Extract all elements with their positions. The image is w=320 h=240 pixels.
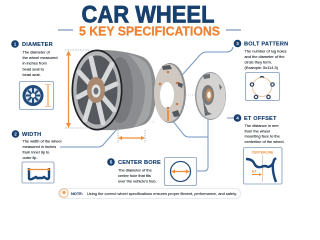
- heading: diameter: DIAMETER: [22, 42, 53, 48]
- badge 4: 4: [236, 116, 239, 121]
- diameter arrow: [65, 50, 90, 128]
- diameter description: bead seat to: [22, 66, 44, 71]
- heading: center bore: CENTER BORE: [118, 160, 161, 166]
- leader lines: [60, 47, 234, 171]
- et offset diagram: [244, 148, 282, 184]
- brake rotor disc: [154, 63, 186, 123]
- title: CAR WHEEL: [82, 2, 214, 28]
- wheel barrel: [100, 50, 156, 130]
- center bore description: over the vehicle's hub.: [118, 178, 157, 184]
- et offset description: centerline of the wheel.: [244, 139, 285, 144]
- bolt pattern diagram: [246, 72, 280, 100]
- width description: measured in inches: [22, 144, 56, 149]
- et offset description: The distance in mm: [244, 123, 278, 128]
- icon: note bulb: [60, 189, 68, 197]
- diameter description: bead seat.: [22, 72, 41, 77]
- et offset diagram: CENTERLINE: [252, 150, 274, 154]
- badge 1: 1: [14, 42, 17, 47]
- heading: bolt pattern: BOLT PATTERN: [244, 42, 288, 48]
- hub disc: [150, 72, 226, 122]
- et offset description: from the wheel: [244, 128, 270, 133]
- width description: from inner lip to: [22, 150, 49, 154]
- panel: width: [12, 130, 62, 183]
- badge 2: 2: [14, 132, 17, 137]
- diameter diagram: [20, 82, 54, 110]
- heading: width: WIDTH: [22, 132, 41, 138]
- width arrow: [118, 130, 145, 143]
- note bar: [58, 188, 240, 198]
- subtitle: 5 KEY SPECIFICATIONS: [79, 23, 220, 38]
- center bore description: The diameter of the: [118, 168, 152, 172]
- panel: bolt pattern: [234, 40, 288, 100]
- note text: Using the correct wheel specifications ensures proper fitment, performance, and safety.: [87, 191, 237, 196]
- bolt pattern description: and the diameter of the: [244, 54, 285, 59]
- badge 5: 5: [110, 160, 113, 165]
- bolt pattern description: (Example: 5x114.3): [244, 65, 279, 70]
- diameter description: in inches from: [22, 61, 47, 66]
- width description: The width of the wheel: [22, 138, 62, 144]
- diameter description: the wheel measured: [22, 55, 58, 60]
- center bore diagram: [164, 158, 196, 186]
- width description: outer lip.: [22, 155, 37, 160]
- badge 3: 3: [236, 41, 239, 46]
- note text: NOTE:: [71, 191, 83, 196]
- panel: center bore: [107, 158, 196, 186]
- bolt pattern description: circle they form.: [244, 60, 272, 64]
- center bore description: center hole that fits: [118, 173, 151, 178]
- et offset description: mounting face to the: [244, 134, 280, 139]
- heading: et offset: ET OFFSET: [244, 116, 277, 122]
- panel: diameter: [11, 40, 58, 110]
- et offset diagram: ET: [252, 170, 257, 174]
- diameter description: The diameter of: [22, 49, 51, 54]
- width diagram: [22, 162, 54, 183]
- wheel face with spokes: [72, 50, 122, 130]
- bolt pattern description: The number of lug holes: [244, 48, 287, 54]
- panel: et offset: [234, 114, 285, 184]
